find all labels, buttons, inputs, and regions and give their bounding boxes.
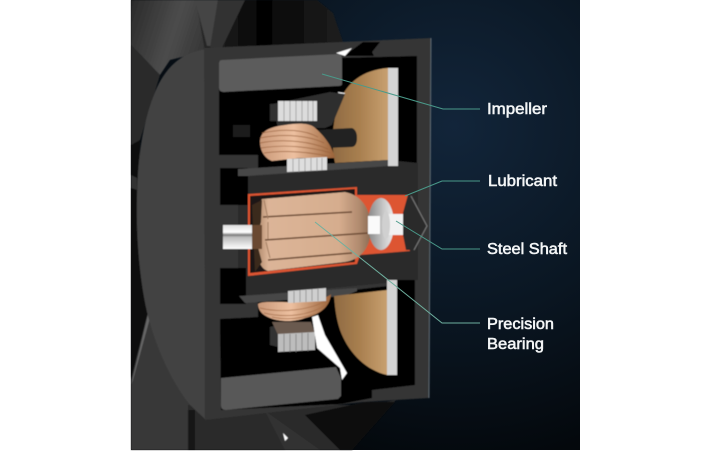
white bar upper [388,68,398,166]
gray inner bracket [272,92,345,128]
fan artwork [131,0,431,450]
right steel shaft [368,211,406,239]
lower copper coil [258,294,331,321]
lower shelf [239,288,357,303]
black shaft upper [315,128,357,148]
rotor [252,192,371,272]
background panel [131,0,580,450]
end cap [403,195,427,250]
callout: Steel Shaft: Steel Shaft [487,241,568,258]
impeller magnet lower [221,367,341,410]
white bar lower [387,280,397,375]
small side cavities [220,168,248,205]
teeth lower of upper coil [287,157,327,172]
copper coil upper [260,124,335,161]
lower cavity [220,280,415,410]
orange bearing housing [248,187,410,276]
upper shelf [238,160,388,176]
white piece [312,315,347,380]
left steel shaft [223,225,253,249]
callout: Impeller [322,74,548,118]
teeth lowest [270,322,315,352]
upper cavity [219,56,417,169]
callout: Lubricant [405,173,558,196]
lower upper teeth [288,288,326,303]
white glints [336,48,352,56]
tan lower stator [334,290,387,375]
callout: Precision Bearing: Bearing [487,336,544,353]
callout: Steel Shaft [396,221,568,258]
impeller magnet upper [219,54,342,92]
central block [238,160,418,296]
callout: Lubricant: Lubricant [488,173,558,190]
teeth upper [270,101,317,121]
callout: Precision Bearing [315,222,554,353]
curved side blade [137,49,206,420]
tan upper stator [333,68,388,163]
bearing disc [368,198,394,250]
fan blades behind housing [131,0,396,450]
callout: Precision Bearing: Precision [487,316,554,333]
housing [204,38,431,420]
callout: Impeller: Impeller [487,101,548,118]
